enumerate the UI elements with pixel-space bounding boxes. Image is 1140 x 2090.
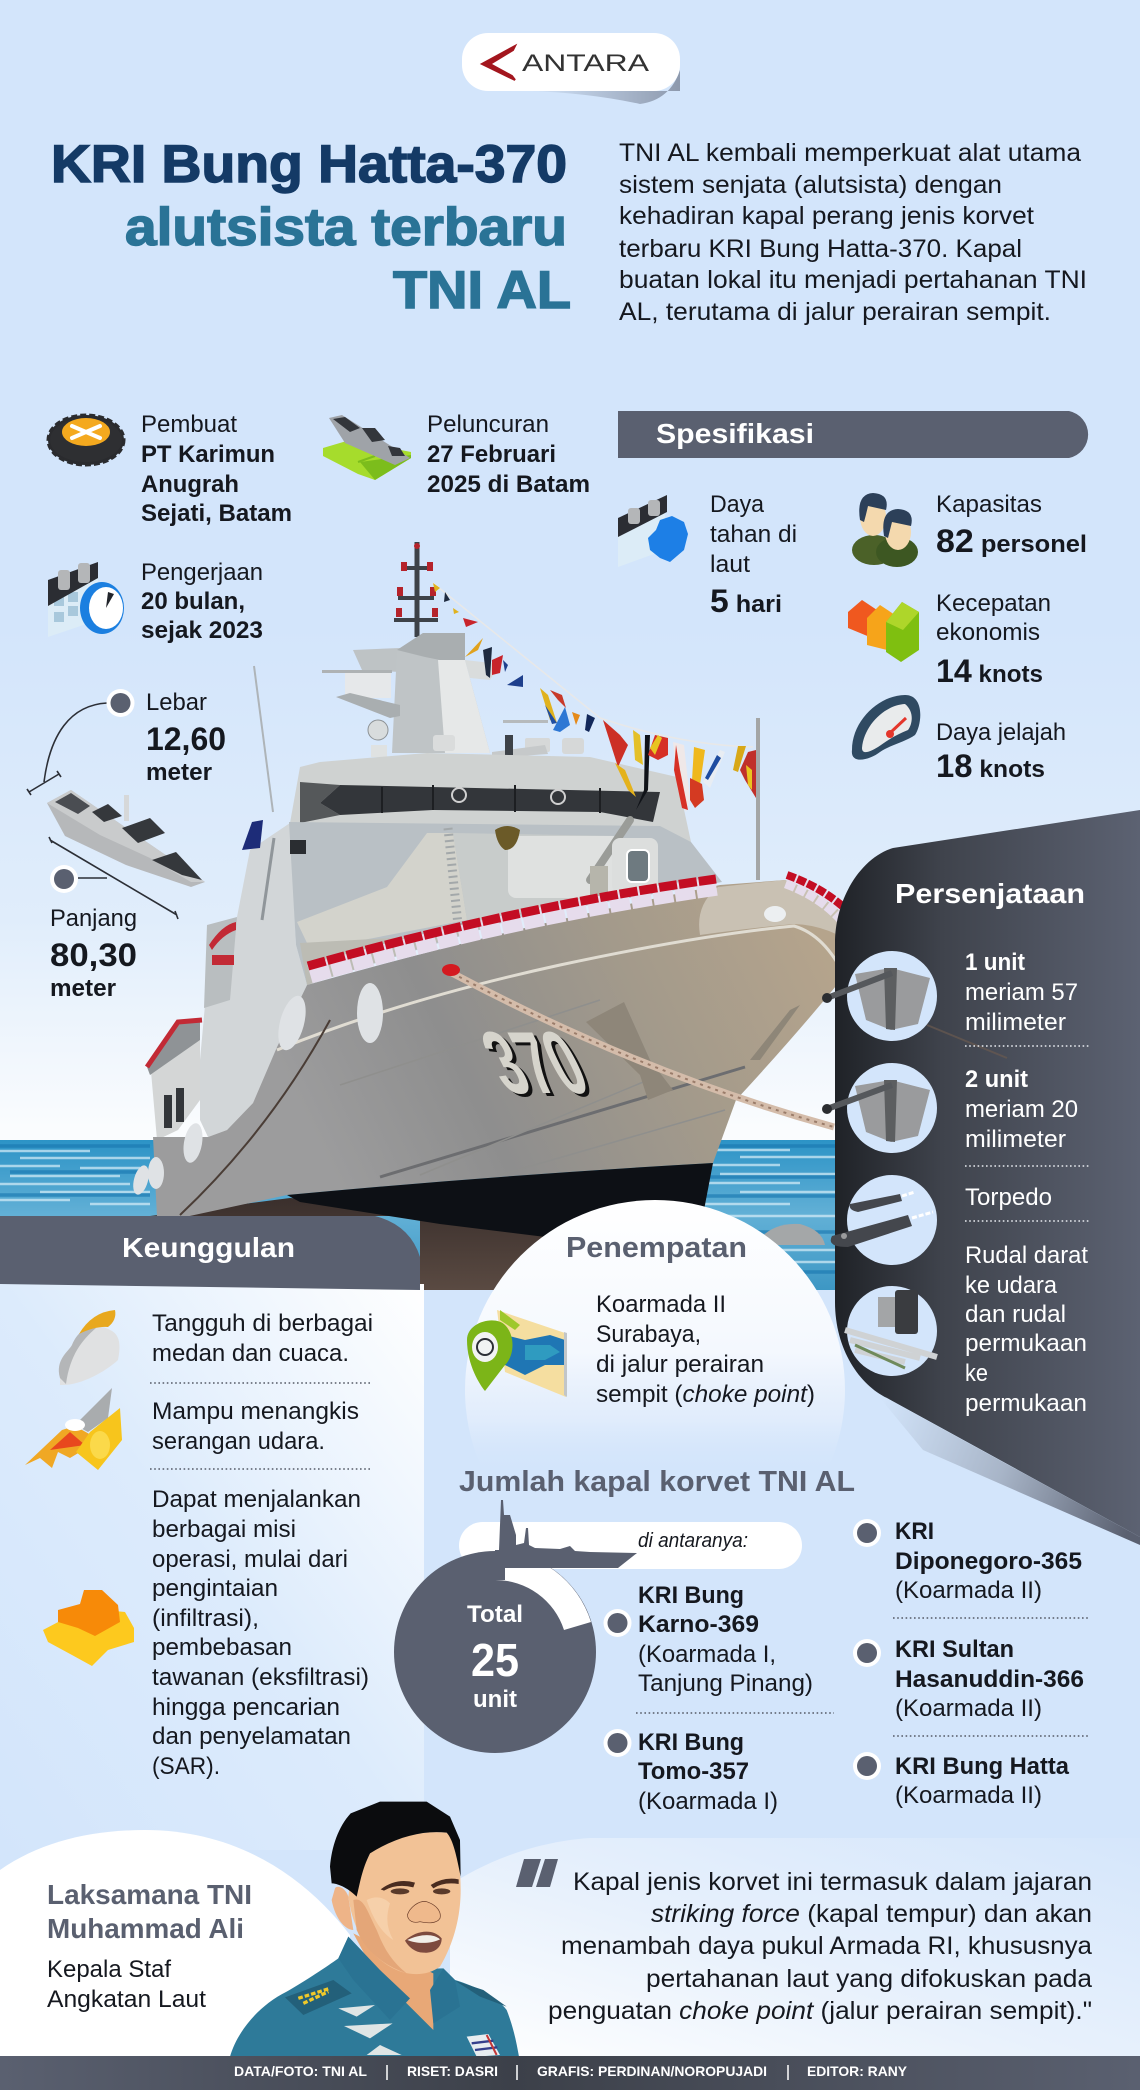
text: item 3 bbox=[152, 1486, 369, 1780]
text: Daya tahan di laut: laut bbox=[710, 551, 750, 578]
item: KRI Bung Hatta: KRI Bung Hatta bbox=[895, 1753, 1070, 1780]
panel shadow bbox=[875, 1392, 1140, 1545]
text: Pengerjaan: 20 bulan, bbox=[141, 588, 245, 615]
panel: Persenjataan bbox=[822, 810, 1140, 1545]
panel: name card bbox=[0, 1830, 350, 2056]
text: 20 mm cannon: milimeter bbox=[965, 1126, 1066, 1153]
ship hull bbox=[153, 880, 865, 1217]
text: Daya tahan di laut: tahan di bbox=[710, 521, 797, 548]
text: Pembuat: Pembuat bbox=[141, 411, 237, 438]
pie chart: total 25 unit: Total bbox=[467, 1601, 523, 1628]
ship hull details bbox=[277, 906, 845, 1177]
panel shape bbox=[835, 810, 1140, 1537]
text: lokasi bbox=[596, 1291, 815, 1408]
intro paragraph: AL, terutama di jalur perairan sempit. bbox=[619, 298, 1051, 326]
text: lokasi: di jalur perairan bbox=[596, 1351, 764, 1378]
title: KRI Bung Hatta-370 bbox=[51, 135, 567, 194]
text: Kapasitas bbox=[936, 491, 1087, 559]
panel: name card: Kepala Staf bbox=[47, 1956, 171, 1983]
text: item 3: operasi, mulai dari bbox=[152, 1546, 348, 1573]
signal flags bbox=[433, 583, 756, 812]
item: KRI Diponegoro-365: (Koarmada II) bbox=[895, 1577, 1042, 1604]
text: item 3: tawanan (eksfiltrasi) bbox=[152, 1664, 369, 1691]
heading: Penempatan bbox=[566, 1232, 747, 1264]
icon: top view of corvette bbox=[47, 790, 205, 887]
title bbox=[51, 135, 571, 320]
flag pole bbox=[756, 718, 760, 880]
pill: di antaranya bbox=[459, 1522, 802, 1569]
photo: warship KRI Bung Hatta-370 bbox=[130, 542, 865, 1240]
text: Lebar bbox=[146, 689, 226, 786]
text: lokasi: Koarmada II bbox=[596, 1291, 726, 1318]
heading: Keunggulan bbox=[122, 1232, 295, 1263]
item: KRI Bung Karno-369: Karno-369 bbox=[638, 1611, 759, 1638]
heading bar bbox=[0, 1216, 420, 1290]
bottom band background bbox=[0, 1850, 1140, 2056]
panel: Keunggulan bbox=[0, 1216, 420, 1780]
quote text: menambah daya pukul Armada RI, khususnya bbox=[561, 1932, 1092, 1960]
text: item 3: pengintaian bbox=[152, 1575, 278, 1602]
ship mast bbox=[394, 542, 438, 637]
text: Kapasitas: 82 personel bbox=[936, 523, 1087, 559]
text: item 3: dan penyelamatan bbox=[152, 1723, 351, 1750]
text: item 3: berbagai misi bbox=[152, 1516, 296, 1543]
icon: calendar with gear bbox=[618, 495, 688, 567]
text: missiles: permukaan bbox=[965, 1390, 1087, 1417]
item: KRI Sultan Hasanuddin-366: Hasanuddin-366 bbox=[895, 1666, 1084, 1693]
ship front wall bbox=[242, 820, 722, 985]
title: TNI AL bbox=[393, 261, 571, 320]
text: Pengerjaan bbox=[141, 559, 263, 644]
intro paragraph: TNI AL kembali memperkuat alat utama bbox=[619, 139, 1081, 167]
footer credits bar: EDITOR: RANY bbox=[807, 2063, 908, 2079]
icon: launched ship on green slab bbox=[323, 415, 411, 480]
text: Kecepatan ekonomis bbox=[936, 590, 1051, 689]
text: Peluncuran bbox=[427, 411, 590, 498]
ship side superstructure bbox=[147, 823, 307, 1140]
footer credits bar: GRAFIS: PERDINAN/NOROPUJADI bbox=[537, 2063, 767, 2079]
heading bar bbox=[618, 411, 1088, 458]
lower-left background panel bbox=[0, 1284, 424, 1850]
text: lokasi: Surabaya, bbox=[596, 1321, 701, 1348]
ship hull number 370: 370 bbox=[466, 1014, 604, 1112]
text: missiles: ke bbox=[965, 1360, 988, 1387]
quote text: Kapal jenis korvet ini termasuk dalam jajaran bbox=[573, 1868, 1092, 1896]
text: Peluncuran: Peluncuran bbox=[427, 411, 549, 438]
section: Jumlah kapal korvet TNI AL bbox=[394, 1466, 1090, 1815]
text: Lebar: Lebar bbox=[146, 689, 207, 716]
footer credits bar: DATA/FOTO: TNI AL bbox=[234, 2063, 367, 2079]
text: item 2: Mampu menangkis bbox=[152, 1398, 359, 1425]
text: Pembuat: Sejati, Batam bbox=[141, 500, 292, 527]
text: Panjang: 80,30 bbox=[50, 937, 137, 973]
text: Panjang: Panjang bbox=[50, 905, 137, 932]
panel: name card: Angkatan Laut bbox=[47, 1986, 206, 2013]
text: Kecepatan ekonomis: 14 knots bbox=[936, 653, 1043, 689]
icon: 57 mm cannon bbox=[822, 951, 937, 1041]
text: Kapasitas: Kapasitas bbox=[936, 491, 1042, 518]
text: lokasi: sempit (choke point) bbox=[596, 1381, 815, 1408]
icon: map and pin bbox=[467, 1310, 567, 1397]
text: 57 mm cannon: meriam 57 bbox=[965, 979, 1078, 1006]
text: Lebar: 12,60 bbox=[146, 721, 226, 757]
text: 57 mm cannon: milimeter bbox=[965, 1009, 1066, 1036]
icon: personnel bbox=[852, 493, 918, 567]
item: KRI Diponegoro-365: KRI bbox=[895, 1518, 934, 1545]
text: Pengerjaan: sejak 2023 bbox=[141, 617, 263, 644]
text: Peluncuran: 2025 di Batam bbox=[427, 471, 590, 498]
text: Peluncuran: 27 Februari bbox=[427, 441, 556, 468]
quote text: penguatan choke point (jalur perairan sempit)." bbox=[548, 1997, 1092, 2025]
item: KRI Bung Karno-369: KRI Bung bbox=[638, 1582, 744, 1609]
bullet: Panjang bbox=[50, 865, 78, 893]
ship bridge and windows bbox=[290, 753, 691, 842]
pill: di antaranya: di antaranya: bbox=[638, 1530, 748, 1552]
text: item 2 bbox=[152, 1398, 359, 1455]
text: Pengerjaan: Pengerjaan bbox=[141, 559, 263, 586]
pie chart: total 25 unit: 25 bbox=[471, 1634, 519, 1686]
panel: Penempatan bbox=[465, 1200, 845, 1580]
text: Pembuat bbox=[141, 411, 292, 527]
intro paragraph: kehadiran kapal perang jenis korvet bbox=[619, 202, 1034, 230]
text: missiles: dan rudal bbox=[965, 1301, 1066, 1328]
item: KRI Diponegoro-365: Diponegoro-365 bbox=[895, 1548, 1082, 1575]
icon: speed bars bbox=[848, 600, 919, 662]
intro paragraph bbox=[619, 139, 1087, 326]
photo: sea bbox=[0, 1140, 840, 1290]
text: missiles: permukaan bbox=[965, 1330, 1087, 1357]
item: KRI Bung Karno-369: (Koarmada I, bbox=[638, 1641, 776, 1668]
footer credits bar: RISET: DASRI bbox=[407, 2063, 498, 2079]
quote text: striking force (kapal tempur) dan akan bbox=[651, 1900, 1092, 1928]
ship antenna bbox=[254, 666, 273, 812]
text: Daya jelajah: Daya jelajah bbox=[936, 719, 1066, 746]
heading: Persenjataan bbox=[895, 878, 1085, 909]
text: Daya tahan di laut bbox=[710, 491, 797, 619]
icon: missile launcher bbox=[845, 1286, 937, 1376]
text: Pembuat: PT Karimun bbox=[141, 441, 275, 468]
intro paragraph: terbaru KRI Bung Hatta-370. Kapal bbox=[619, 235, 1022, 263]
icon: tyre with wrench bbox=[48, 415, 124, 465]
text: 57 mm cannon: 1 unit bbox=[965, 949, 1025, 976]
item: KRI Sultan Hasanuddin-366: KRI Sultan bbox=[895, 1636, 1014, 1663]
text: item 3: Dapat menjalankan bbox=[152, 1486, 361, 1513]
quote text: pertahanan laut yang difokuskan pada bbox=[646, 1965, 1092, 1993]
dimension lines bbox=[27, 703, 178, 919]
logo: ANTARA bbox=[462, 33, 680, 104]
quote mark bbox=[516, 1859, 558, 1887]
text: item 1: medan dan cuaca. bbox=[152, 1340, 349, 1367]
text: Panjang: meter bbox=[50, 975, 116, 1002]
item: KRI Bung Karno-369: Tanjung Pinang) bbox=[638, 1670, 813, 1697]
photo: rocks bbox=[150, 1198, 600, 1290]
item: KRI Sultan Hasanuddin-366: (Koarmada II) bbox=[895, 1695, 1042, 1722]
ship bunting bbox=[308, 875, 861, 974]
pie chart: total 25 unit bbox=[394, 1551, 596, 1753]
ship hull number 370: 370 bbox=[470, 1017, 608, 1115]
quote text bbox=[548, 1868, 1092, 2025]
text: item 3: (SAR). bbox=[152, 1753, 220, 1780]
panel: quote bbox=[450, 1838, 1140, 2056]
heading: Jumlah kapal korvet TNI AL bbox=[459, 1466, 855, 1498]
title: alutsista terbaru bbox=[125, 198, 567, 257]
text: missiles bbox=[965, 1242, 1088, 1417]
icon: cloud and sun bbox=[59, 1310, 120, 1385]
text: Daya tahan di laut: 5 hari bbox=[710, 583, 782, 619]
logo: ANTARA: ANTARA bbox=[522, 50, 649, 77]
text: Pembuat: Anugrah bbox=[141, 471, 239, 498]
heading: Spesifikasi bbox=[656, 418, 814, 449]
intro paragraph: sistem senjata (alutsista) dengan bbox=[619, 171, 1002, 199]
ship fenders bbox=[130, 983, 383, 1196]
text: Kecepatan ekonomis: ekonomis bbox=[936, 619, 1040, 646]
text: Daya jelajah bbox=[936, 719, 1066, 784]
text: item 3: pembebasan bbox=[152, 1634, 292, 1661]
icon: calendar and clock bbox=[48, 562, 124, 637]
ship mooring lines bbox=[180, 964, 834, 1215]
text: Daya tahan di laut: Daya bbox=[710, 491, 765, 518]
text: Daya jelajah: 18 knots bbox=[936, 748, 1045, 784]
text: 20 mm cannon: meriam 20 bbox=[965, 1096, 1078, 1123]
item: KRI Bung Tomo-357: Tomo-357 bbox=[638, 1758, 749, 1785]
panel: name card: Laksamana TNI bbox=[47, 1879, 252, 1910]
lower-right background bbox=[424, 1290, 1140, 1850]
footer credits bar bbox=[0, 2056, 1140, 2090]
text: missiles: ke udara bbox=[965, 1272, 1058, 1299]
text: missiles: Rudal darat bbox=[965, 1242, 1088, 1269]
text: item 1 bbox=[152, 1310, 373, 1367]
ship main gun bbox=[495, 820, 658, 898]
item: KRI Bung Hatta bbox=[853, 1752, 1070, 1809]
icon: 20 mm cannon bbox=[822, 1063, 937, 1153]
text: 20 mm cannon bbox=[965, 1066, 1078, 1153]
ship tower bbox=[322, 633, 584, 758]
portrait: Laksamana Muhammad Ali bbox=[230, 1802, 519, 2057]
item: KRI Diponegoro-365 bbox=[853, 1518, 1082, 1604]
text: item 1: Tangguh di berbagai bbox=[152, 1310, 373, 1337]
icon: gauge bbox=[852, 695, 920, 760]
icon: missile and shield bbox=[25, 1388, 122, 1470]
text: Kecepatan ekonomis: Kecepatan bbox=[936, 590, 1051, 617]
ship deck rim bbox=[699, 880, 865, 950]
text: 57 mm cannon bbox=[965, 949, 1078, 1036]
item: KRI Bung Tomo-357: (Koarmada I) bbox=[638, 1788, 778, 1815]
item: KRI Bung Tomo-357 bbox=[604, 1729, 778, 1815]
panel: Spesifikasi bbox=[618, 411, 1088, 784]
text: 20 mm cannon: 2 unit bbox=[965, 1066, 1028, 1093]
item: KRI Sultan Hasanuddin-366 bbox=[853, 1636, 1084, 1722]
bullet: Lebar bbox=[106, 689, 134, 717]
item: KRI Bung Tomo-357: KRI Bung bbox=[638, 1729, 744, 1756]
panel: name card: Muhammad Ali bbox=[47, 1913, 244, 1944]
text: Lebar: meter bbox=[146, 759, 212, 786]
logo shadow bbox=[530, 70, 680, 104]
ship boot-top bbox=[287, 1163, 713, 1240]
white circle backdrop bbox=[465, 1200, 845, 1580]
intro paragraph: buatan lokal itu menjadi pertahanan TNI bbox=[619, 266, 1087, 294]
text: item 2: serangan udara. bbox=[152, 1428, 325, 1455]
icon: ship silhouette bbox=[495, 1500, 637, 1580]
ship dimension diagram bbox=[27, 689, 226, 1002]
icon: puzzle pieces bbox=[43, 1590, 134, 1666]
pie chart: total 25 unit: unit bbox=[473, 1686, 517, 1713]
text: item 3: hingga pencarian bbox=[152, 1694, 340, 1721]
text: item 3: (infiltrasi), bbox=[152, 1605, 259, 1632]
icon: torpedo bbox=[831, 1175, 937, 1265]
text: Panjang bbox=[50, 905, 137, 1002]
item: KRI Bung Karno-369 bbox=[604, 1582, 813, 1697]
item: KRI Bung Hatta: (Koarmada II) bbox=[895, 1782, 1042, 1809]
text: Torpedo: Torpedo bbox=[965, 1184, 1052, 1211]
